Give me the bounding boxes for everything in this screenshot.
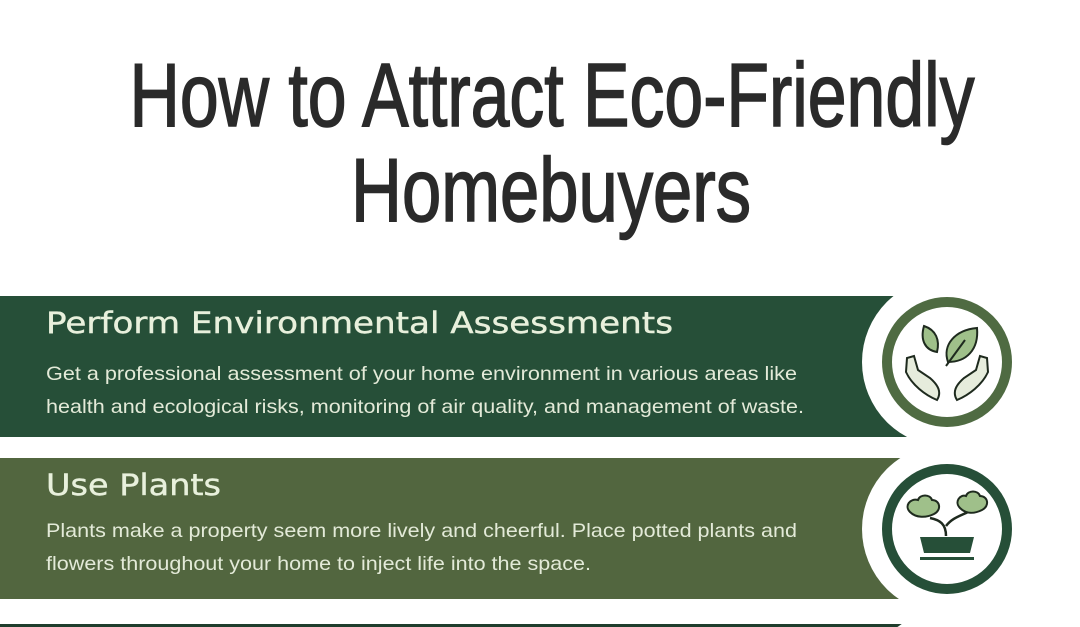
- panel: next section (partial): [0, 624, 960, 627]
- icon: potted bonsai: [887, 469, 1007, 589]
- body text: plants: Plants make a property seem more lively and cheerful. Place potted plants and: [46, 520, 797, 542]
- icon: hands with leaves: [887, 302, 1007, 422]
- panel: perform environmental assessments: [0, 296, 960, 437]
- title: [130, 46, 974, 241]
- body text: plants: flowers throughout your home to inject life into the space.: [46, 553, 591, 575]
- body text: assessments: [46, 363, 804, 418]
- panel: use plants: [0, 458, 960, 599]
- body text: assessments: Get a professional assessment of your home environment in various areas like: [46, 363, 797, 385]
- title: Homebuyers: [351, 141, 751, 241]
- heading: perform environmental assessments: Perform Environmental Assessments: [46, 306, 673, 340]
- heading: use plants: Use Plants: [46, 468, 221, 502]
- body text: assessments: health and ecological risks, monitoring of air quality, and management of waste.: [46, 396, 804, 418]
- body text: plants: [46, 520, 797, 575]
